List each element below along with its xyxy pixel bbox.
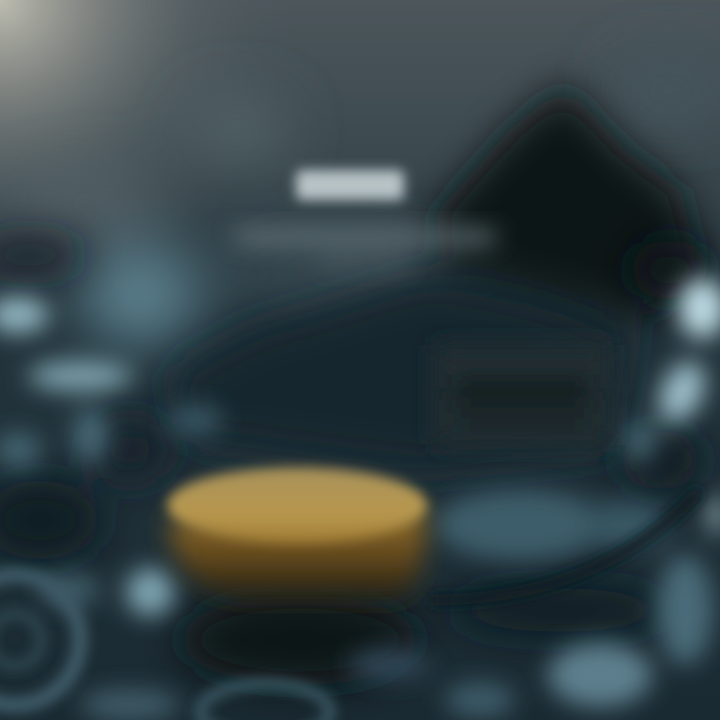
subtitle placeholder blur: [235, 230, 495, 268]
misty slate background shapes: [10, 60, 720, 345]
title placeholder blur: [296, 170, 404, 200]
disc top: [167, 467, 427, 543]
dark foreground patches: [0, 239, 710, 685]
pale teal foreground rocks: [0, 278, 720, 720]
dark mountain silhouette: [170, 85, 700, 470]
dark swirl rings: [0, 490, 700, 720]
disc side: [168, 510, 426, 600]
light glow top left: [0, 0, 720, 400]
dark text block blur: [435, 345, 610, 445]
gold disc: [167, 467, 427, 600]
